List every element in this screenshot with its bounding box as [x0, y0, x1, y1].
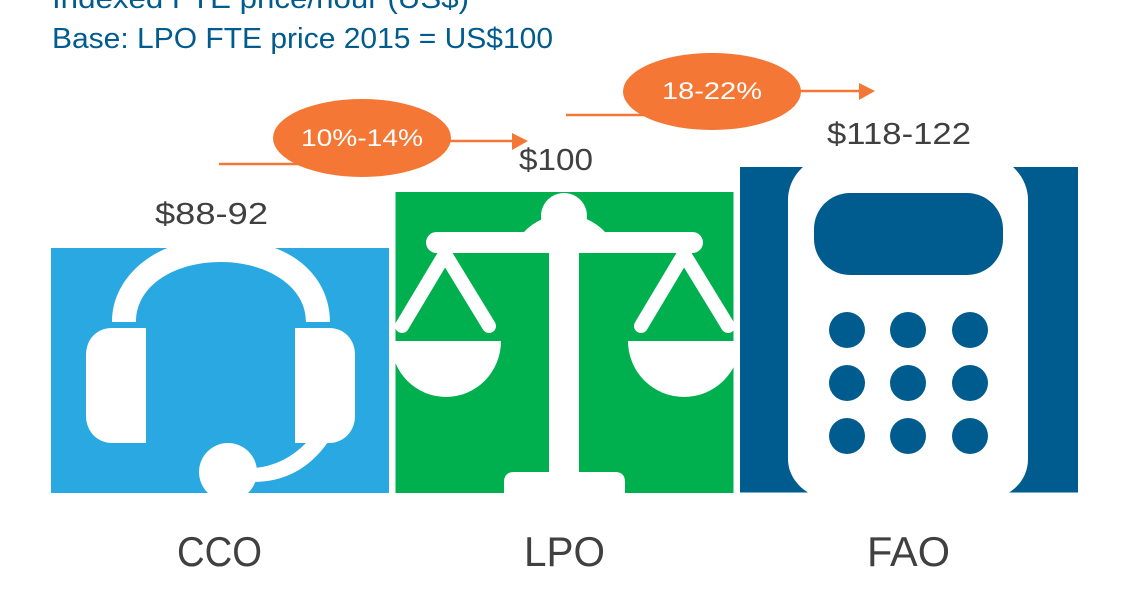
price: LPO: $100	[519, 142, 593, 177]
heading	[52, 0, 553, 55]
category labels	[177, 528, 950, 575]
LPO background	[396, 192, 734, 493]
panel: FAO	[740, 167, 1078, 492]
heading line 2: Base: LPO FTE price 2015 = US$100	[52, 23, 553, 55]
label: LPO: LPO	[524, 528, 605, 575]
callout: 10%-14%: 10%-14%	[301, 125, 423, 152]
CCO background	[51, 248, 389, 493]
label: CCO: CCO	[177, 528, 262, 575]
arrow: LPO to FAO	[566, 53, 875, 130]
icon: headset	[86, 247, 355, 501]
arrow: CCO to LPO	[219, 99, 528, 177]
callout: 18-22%: 18-22%	[662, 78, 762, 105]
panel: LPO	[391, 192, 740, 493]
label: FAO: FAO	[867, 528, 950, 575]
icon: calculator	[788, 167, 1028, 492]
icon: scales	[391, 193, 740, 493]
FAO background	[740, 167, 1078, 492]
price: CCO: $88-92	[155, 196, 268, 231]
panel: CCO	[51, 247, 389, 501]
callout: 10%-14%	[273, 99, 451, 177]
price labels	[155, 116, 971, 231]
callout: 18-22%	[623, 53, 801, 130]
price: FAO: $118-122	[827, 116, 971, 151]
